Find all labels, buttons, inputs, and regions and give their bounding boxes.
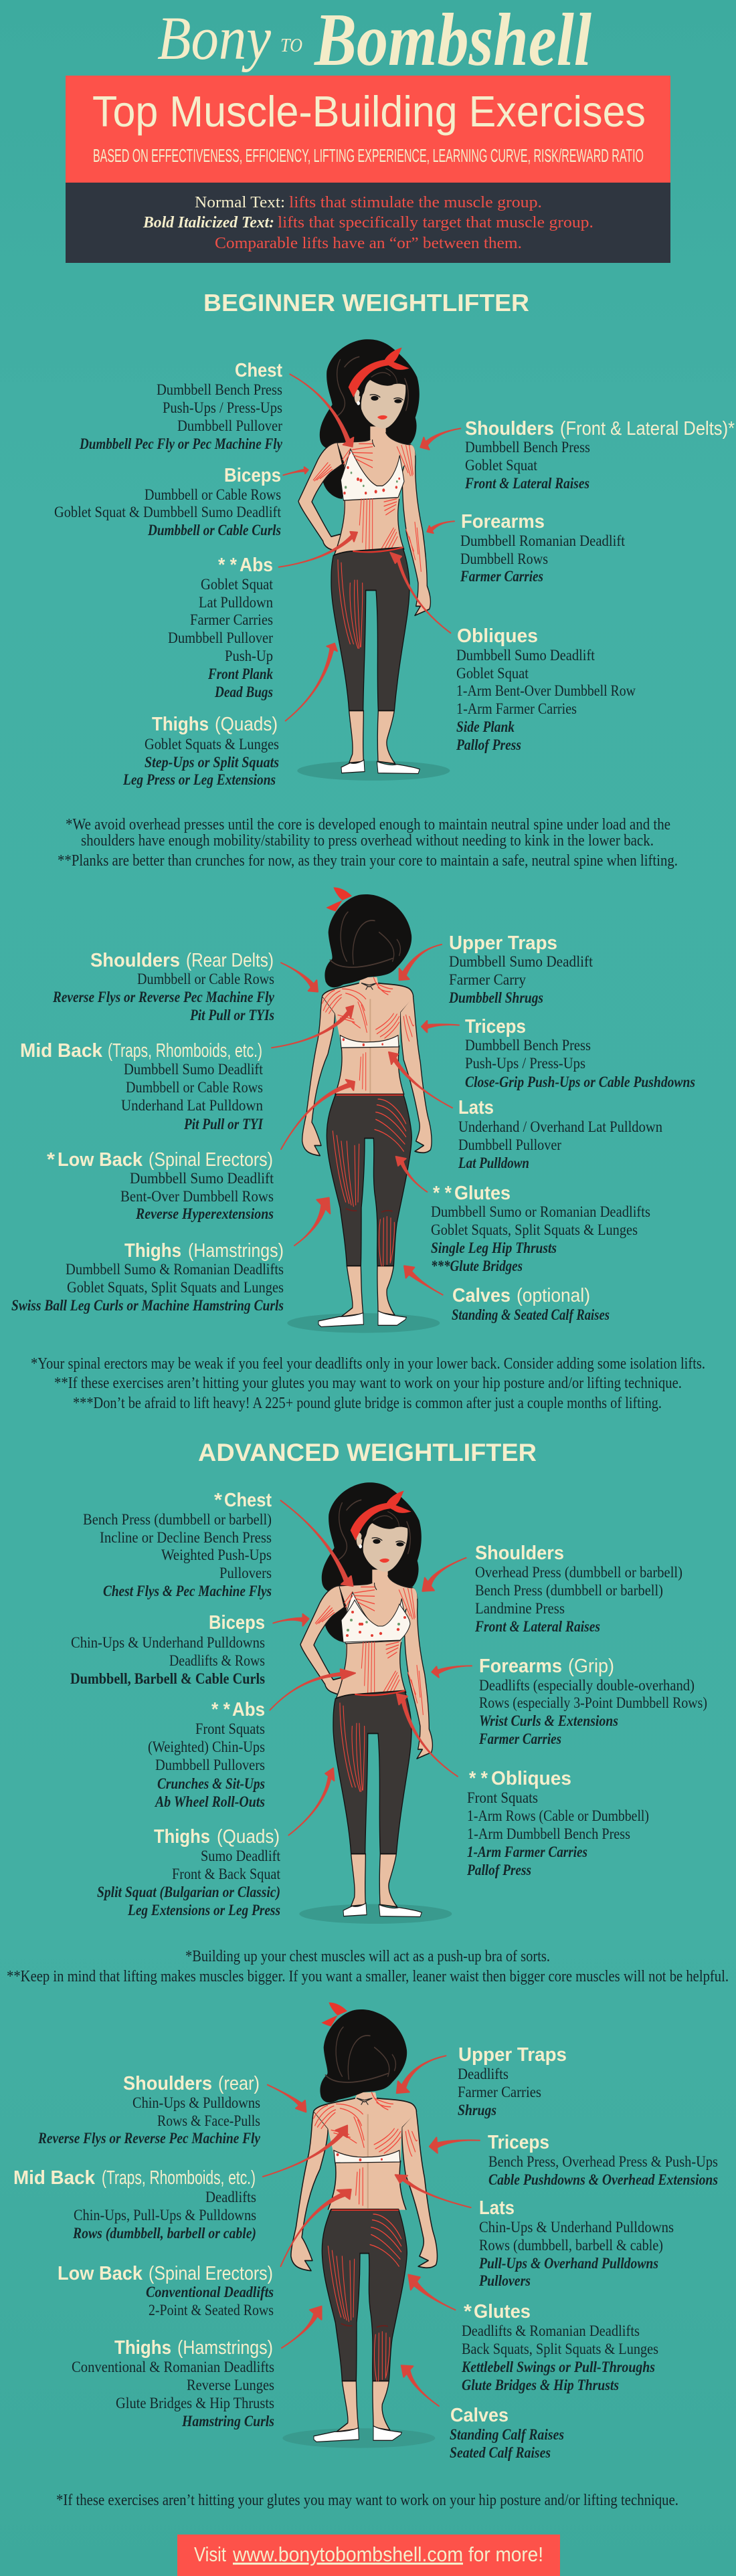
text block: advanced mid back: Mid Back xyxy=(13,2167,96,2189)
text block: glutes: Glutes xyxy=(454,1183,511,1204)
footnotes: beginner back xyxy=(31,1355,705,1412)
text block: advanced shoulders: Bench Press (dumbbell or barbell) xyxy=(475,1582,663,1599)
text block: chest: Push-Ups / Press-Ups xyxy=(163,399,282,416)
text block: mid back: Mid Back xyxy=(20,1040,103,1062)
text block: advanced hamstrings: Hamstring Curls xyxy=(181,2413,274,2430)
text block: shoulders: Shoulders xyxy=(465,418,554,439)
title: bony to bombshell logo: Bombshell xyxy=(313,0,591,82)
text block: lats: Lat Pulldown xyxy=(458,1155,529,1171)
text block: advanced abs: Abs xyxy=(232,1699,265,1720)
arrow: mid back xyxy=(272,1005,353,1048)
text block: advanced obliques: Front Squats xyxy=(467,1789,538,1806)
text block: advanced lats: Chin-Ups & Underhand Pulldowns xyxy=(479,2219,674,2236)
text block: biceps: Goblet Squat & Dumbbell Sumo Deadlift xyxy=(54,504,282,520)
arrow: chest xyxy=(290,374,353,447)
footnotes: beginner front: shoulders have enough mobility/stability to press overhead without needing to kink in the lower back. xyxy=(81,832,654,850)
text block: biceps: Biceps xyxy=(224,465,281,486)
text block: advanced rear shoulders: Chin-Ups & Pulldowns xyxy=(132,2094,260,2111)
text block: forearms: Dumbbell Romanian Deadlift xyxy=(460,532,626,549)
text block: forearms xyxy=(460,511,626,585)
text block: advanced upper traps: Shrugs xyxy=(458,2102,496,2118)
arrow: upper traps xyxy=(399,945,442,980)
illustration: woman front view, advanced xyxy=(299,1482,452,1924)
text block: thighs quads: (Quads) xyxy=(215,714,278,735)
text block: advanced obliques: 1-Arm Rows (Cable or Dumbbell) xyxy=(467,1807,649,1824)
text block: advanced chest: Bench Press (dumbbell or barbell) xyxy=(83,1511,272,1528)
text block: advanced rear shoulders xyxy=(37,2073,261,2147)
arrow: biceps xyxy=(273,1614,309,1626)
panel: header red box xyxy=(66,76,670,183)
text block: thighs quads: Leg Press or Leg Extensions xyxy=(122,771,276,788)
text block: lats: Dumbbell Pullover xyxy=(458,1136,561,1153)
text block: mid back xyxy=(20,1040,264,1132)
text block: advanced lats: Pullovers xyxy=(478,2272,531,2289)
text block: abs: Push-Up xyxy=(225,648,273,664)
text block: abs: * * xyxy=(218,555,238,576)
text block: thighs quads: Goblet Squats & Lunges xyxy=(145,736,279,753)
footer: call to action: www.bonytobombshell.com xyxy=(232,2543,463,2566)
text block: abs: Goblet Squat xyxy=(201,576,274,593)
text block: advanced calves: Standing Calf Raises xyxy=(450,2426,564,2443)
text block: advanced shoulders: Front & Lateral Raises xyxy=(474,1618,600,1635)
text block: glutes: Goblet Squats, Split Squats & Lunges xyxy=(431,1221,638,1238)
text block: thighs quads xyxy=(122,714,279,788)
arrow: forearms xyxy=(432,1666,472,1678)
heading: beginner weightlifter: BEGINNER WEIGHTLIFTER xyxy=(203,289,529,316)
text block: advanced chest: * xyxy=(214,1490,223,1511)
text block: advanced hamstrings: (Hamstrings) xyxy=(177,2337,273,2359)
text block: obliques: Goblet Squat xyxy=(456,665,529,682)
text block: triceps xyxy=(465,1016,695,1090)
arrow: obliques xyxy=(390,553,450,633)
text block: advanced mid back xyxy=(13,2167,256,2242)
text block: advanced biceps: Dumbbell, Barbell & Cable Curls xyxy=(70,1670,265,1687)
text block: forearms: Forearms xyxy=(461,511,545,532)
text block: low back xyxy=(47,1149,274,1222)
text block: biceps xyxy=(54,465,282,538)
text block: mid back: (Traps, Rhomboids, etc.) xyxy=(108,1040,262,1062)
text block: obliques: 1-Arm Bent-Over Dumbbell Row xyxy=(456,682,636,699)
text block: rear shoulders: Reverse Flys or Reverse Pec Machine Fly xyxy=(52,989,275,1005)
text block: advanced hamstrings: Conventional & Romanian Deadlifts xyxy=(72,2359,274,2375)
arrow: abs xyxy=(279,532,357,567)
text block: upper traps: Farmer Carry xyxy=(449,971,526,988)
text block: advanced hamstrings: Thighs xyxy=(114,2337,171,2359)
text block: hamstrings: (Hamstrings) xyxy=(188,1240,284,1262)
text block: advanced abs: Front Squats xyxy=(195,1720,265,1737)
text block: advanced mid back: Rows (dumbbell, barbell or cable) xyxy=(72,2225,256,2242)
text block: shoulders: Front & Lateral Raises xyxy=(464,475,589,492)
footer: call to action: Visit xyxy=(194,2543,226,2566)
text block: advanced hamstrings: Reverse Lunges xyxy=(187,2377,274,2393)
text block: advanced low back: (Spinal Erectors) xyxy=(149,2263,273,2284)
text block: rear shoulders: Pit Pull or TYIs xyxy=(189,1007,274,1023)
text block: triceps: Push-Ups / Press-Ups xyxy=(465,1055,585,1072)
text block: advanced calves xyxy=(450,2405,564,2461)
text block: abs: Front Plank xyxy=(207,666,273,682)
heading: advanced weightlifter: ADVANCED WEIGHTLIFTER xyxy=(198,1439,537,1466)
arrow: mid back xyxy=(263,2125,347,2177)
text block: abs: Farmer Carries xyxy=(190,611,273,628)
text block: advanced glutes: Glutes xyxy=(474,2301,531,2322)
text block: advanced thighs quads: Leg Extensions or Leg Press xyxy=(127,1902,280,1918)
text block: triceps: Triceps xyxy=(465,1016,526,1037)
text block: advanced calves: Calves xyxy=(450,2405,509,2426)
text block: chest xyxy=(79,360,283,452)
arrow: glutes xyxy=(396,1157,427,1192)
legend: comparable lifts: Comparable lifts have an “or” between them. xyxy=(215,235,522,252)
text block: rear shoulders: Dumbbell or Cable Rows xyxy=(137,971,274,987)
text block: forearms: Farmer Carries xyxy=(460,568,543,585)
text block: advanced rear shoulders: (rear) xyxy=(218,2073,260,2094)
text block: upper traps xyxy=(448,932,593,1006)
text block: advanced forearms xyxy=(478,1656,707,1747)
arrows: beginner back xyxy=(272,945,459,1295)
text block: advanced calves: Seated Calf Raises xyxy=(450,2444,551,2461)
arrow: abs xyxy=(270,1669,355,1710)
text block: triceps: Close-Grip Push-Ups or Cable Pushdowns xyxy=(465,1074,695,1090)
text block: glutes: ***Glute Bridges xyxy=(431,1258,523,1274)
text block: advanced chest: Chest xyxy=(224,1490,272,1511)
arrow: hamstrings xyxy=(282,2306,322,2348)
footnotes: beginner front xyxy=(58,816,678,870)
text block: advanced forearms: Forearms xyxy=(479,1656,562,1677)
text block: obliques: 1-Arm Farmer Carries xyxy=(456,700,577,717)
text block: advanced lats: Pull-Ups & Overhand Pulldowns xyxy=(478,2255,658,2272)
text block: advanced low back: Low Back xyxy=(58,2263,143,2284)
arrow: forearms xyxy=(427,521,454,533)
footer: call to action xyxy=(177,2535,560,2576)
text block: triceps: Dumbbell Bench Press xyxy=(465,1037,591,1054)
text block: upper traps: Dumbbell Shrugs xyxy=(448,989,543,1006)
legend: normal text xyxy=(195,194,542,211)
text block: advanced hamstrings: Glute Bridges & Hip Thrusts xyxy=(116,2395,274,2411)
text block: advanced biceps: Deadlifts & Rows xyxy=(169,1652,265,1669)
text block: advanced obliques xyxy=(466,1768,649,1878)
arrow: biceps xyxy=(283,467,308,475)
arrow: low back xyxy=(281,1080,355,1149)
text block: advanced shoulders: Shoulders xyxy=(475,1543,564,1564)
text block: rear shoulders: Shoulders xyxy=(90,950,180,971)
panel: legend dark box xyxy=(66,183,670,263)
legend: bold italicized text xyxy=(143,214,593,231)
text block: advanced mid back: Chin-Ups, Pull-Ups & Pulldowns xyxy=(74,2207,256,2223)
text block: advanced glutes: Back Squats, Split Squats & Lunges xyxy=(462,2341,658,2357)
text block: advanced biceps xyxy=(70,1612,265,1687)
text block: mid back: Dumbbell or Cable Rows xyxy=(126,1079,263,1096)
text block: thighs quads: Step-Ups or Split Squats xyxy=(145,754,279,771)
text block: chest: Chest xyxy=(235,360,282,381)
illustration: woman back view, advanced xyxy=(282,2003,437,2448)
text block: advanced abs: Crunches & Sit-Ups xyxy=(157,1775,265,1792)
heading: top muscle-building exercises: Top Muscle-Building Exercises xyxy=(92,87,646,136)
text block: advanced glutes: Kettlebell Swings or Pull-Throughs xyxy=(461,2359,655,2375)
text block: lats xyxy=(458,1097,662,1171)
text block: advanced shoulders: Overhead Press (dumbbell or barbell) xyxy=(475,1564,682,1581)
legend: bold italicized text: Bold Italicized Text: xyxy=(143,214,274,231)
text block: mid back: Underhand Lat Pulldown xyxy=(121,1097,263,1114)
title: bony to bombshell logo xyxy=(157,0,591,82)
text block: advanced abs: (Weighted) Chin-Ups xyxy=(148,1739,265,1755)
text block: advanced abs: Ab Wheel Roll-Outs xyxy=(154,1793,265,1810)
text block: low back: Dumbbell Sumo Deadlift xyxy=(130,1170,274,1187)
text block: advanced shoulders: Landmine Press xyxy=(475,1600,565,1617)
text block: advanced lats: Rows (dumbbell, barbell & cable) xyxy=(479,2237,663,2254)
text block: glutes: Dumbbell Sumo or Romanian Deadlifts xyxy=(431,1203,650,1220)
arrows: advanced back xyxy=(263,2056,480,2406)
arrow: obliques xyxy=(397,1694,458,1777)
text block: obliques: Side Plank xyxy=(456,718,515,735)
text block: advanced forearms: (Grip) xyxy=(568,1656,614,1677)
text block: low back: Bent-Over Dumbbell Rows xyxy=(120,1188,274,1205)
text block: thighs quads: Thighs xyxy=(152,714,209,735)
text block: abs: Lat Pulldown xyxy=(199,594,273,611)
text block: chest: Dumbbell Pec Fly or Pec Machine Fly xyxy=(79,435,283,452)
text block: low back: Low Back xyxy=(58,1149,143,1171)
text block: advanced forearms: Farmer Carries xyxy=(478,1730,561,1747)
text block: advanced low back: 2-Point & Seated Rows xyxy=(149,2302,274,2318)
text block: obliques: Pallof Press xyxy=(456,736,521,753)
text block: advanced hamstrings xyxy=(72,2337,274,2430)
text block: advanced shoulders xyxy=(474,1543,682,1635)
text block: chest: Dumbbell Pullover xyxy=(177,417,282,434)
text block: glutes: Single Leg Hip Thrusts xyxy=(431,1240,557,1256)
text block: advanced lats xyxy=(478,2197,674,2289)
arrow: calves xyxy=(404,1266,443,1295)
text block: advanced forearms: Rows (especially 3-Point Dumbbell Rows) xyxy=(479,1694,707,1711)
text block: advanced upper traps xyxy=(458,2044,567,2118)
arrow: thighs xyxy=(286,643,337,721)
text block: advanced upper traps: Farmer Carries xyxy=(458,2084,541,2100)
text block: advanced chest: Chest Flys & Pec Machine Flys xyxy=(103,1583,272,1599)
text block: advanced thighs quads: Thighs xyxy=(154,1826,210,1848)
text block: biceps: Dumbbell or Cable Rows xyxy=(145,486,281,503)
text block: advanced low back xyxy=(58,2263,274,2318)
text block: advanced thighs quads: Split Squat (Bulgarian or Classic) xyxy=(97,1884,280,1900)
text block: advanced rear shoulders: Shoulders xyxy=(123,2073,212,2094)
illustration: woman back view, beginner xyxy=(287,888,440,1333)
text block: low back: * xyxy=(47,1149,56,1171)
text block: advanced glutes: Glute Bridges & Hip Thrusts xyxy=(462,2377,619,2393)
text block: advanced glutes: * xyxy=(464,2301,472,2322)
text block: upper traps: Upper Traps xyxy=(449,932,557,954)
text block: abs: Dumbbell Pullover xyxy=(168,629,273,646)
text block: abs xyxy=(168,555,274,700)
legend: normal text: lifts that stimulate the muscle group. xyxy=(289,194,542,211)
text block: advanced glutes: Deadlifts & Romanian Deadlifts xyxy=(462,2322,640,2339)
text block: shoulders: Dumbbell Bench Press xyxy=(465,439,590,456)
text block: advanced abs: Dumbbell Pullovers xyxy=(155,1757,265,1773)
text block: advanced thighs quads: Sumo Deadlift xyxy=(201,1848,281,1864)
text block: obliques: Dumbbell Sumo Deadlift xyxy=(456,647,595,664)
text block: forearms: Dumbbell Rows xyxy=(460,551,548,567)
legend: bold italicized text: lifts that specifically target that muscle group. xyxy=(278,214,593,231)
text block: advanced triceps xyxy=(488,2132,718,2188)
text block: hamstrings: Goblet Squats, Split Squats and Lunges xyxy=(67,1279,284,1296)
text block: advanced rear shoulders: Rows & Face-Pulls xyxy=(157,2112,260,2129)
text block: upper traps: Dumbbell Sumo Deadlift xyxy=(449,953,593,970)
arrow: calves xyxy=(401,2365,439,2406)
text block: hamstrings: Dumbbell Sumo & Romanian Deadlifts xyxy=(66,1261,284,1278)
text block: advanced chest: Pullovers xyxy=(219,1565,272,1581)
text block: glutes xyxy=(431,1183,650,1274)
arrow: lats xyxy=(395,2175,471,2207)
arrow: shoulders xyxy=(422,1558,466,1591)
text block: obliques: Obliques xyxy=(457,625,538,647)
text block: shoulders: Goblet Squat xyxy=(465,457,538,474)
text block: mid back: Pit Pull or TYI xyxy=(183,1116,264,1132)
text block: hamstrings xyxy=(11,1240,284,1314)
arrow: chest xyxy=(280,1500,353,1586)
arrow: low back xyxy=(280,2189,351,2266)
illustration: woman front view, beginner xyxy=(297,339,450,781)
text block: advanced biceps: Biceps xyxy=(209,1612,265,1633)
text block: advanced glutes xyxy=(461,2301,658,2393)
text block: rear shoulders xyxy=(52,950,275,1023)
arrow: triceps xyxy=(430,2137,480,2153)
text block: obliques xyxy=(456,625,636,753)
text block: advanced upper traps: Deadlifts xyxy=(458,2066,509,2082)
text block: advanced lats: Lats xyxy=(479,2197,515,2219)
text block: advanced obliques: 1-Arm Farmer Carries xyxy=(467,1844,587,1860)
footer: call to action: for more! xyxy=(468,2543,543,2566)
text block: advanced mid back: (Traps, Rhomboids, etc.) xyxy=(102,2167,256,2189)
text block: shoulders xyxy=(464,418,735,492)
footnotes: advanced front: *Building up your chest muscles will act as a push-up bra of sorts. xyxy=(185,1948,550,1965)
footnotes: advanced front xyxy=(7,1948,729,1985)
arrows: advanced front xyxy=(270,1500,472,1835)
legend: normal text: Normal Text: xyxy=(195,194,285,211)
text block: calves: Calves xyxy=(452,1285,511,1306)
text block: rear shoulders: (Rear Delts) xyxy=(186,950,274,971)
text block: advanced forearms: Deadlifts (especially double-overhand) xyxy=(479,1677,695,1694)
title: bony to bombshell logo: TO xyxy=(280,35,302,56)
text block: calves: (optional) xyxy=(517,1285,590,1306)
text block: advanced obliques: * * xyxy=(469,1768,488,1789)
text block: calves: Standing & Seated Calf Raises xyxy=(452,1306,610,1323)
text block: mid back: Dumbbell Sumo Deadlift xyxy=(124,1061,264,1078)
arrow: triceps xyxy=(422,1021,459,1032)
text block: low back: (Spinal Erectors) xyxy=(149,1149,273,1171)
text block: advanced obliques: Obliques xyxy=(491,1768,571,1789)
text block: advanced thighs quads: (Quads) xyxy=(217,1826,280,1848)
text block: abs: Dead Bugs xyxy=(214,684,273,700)
text block: low back: Reverse Hyperextensions xyxy=(135,1205,274,1222)
text block: advanced low back: Conventional Deadlifts xyxy=(146,2284,274,2300)
text block: advanced chest: Incline or Decline Bench Press xyxy=(100,1529,272,1546)
text block: advanced triceps: Triceps xyxy=(488,2132,549,2153)
arrow: rear delts xyxy=(281,963,318,992)
text block: advanced abs: * * xyxy=(211,1699,231,1720)
arrow: shoulders xyxy=(420,428,460,450)
arrows: beginner front xyxy=(279,374,460,721)
text block: advanced mid back: Deadlifts xyxy=(205,2189,256,2205)
arrow: glutes xyxy=(408,2275,455,2310)
text block: advanced abs xyxy=(148,1699,265,1810)
text block: chest: Dumbbell Bench Press xyxy=(157,381,282,398)
text block: lats: Lats xyxy=(458,1097,494,1118)
arrow: upper traps xyxy=(397,2056,446,2093)
text block: biceps: Dumbbell or Cable Curls xyxy=(147,522,281,538)
text block: advanced obliques: Pallof Press xyxy=(466,1862,531,1878)
text block: hamstrings: Thighs xyxy=(124,1240,181,1262)
arrow: lats xyxy=(389,1052,452,1108)
text block: advanced upper traps: Upper Traps xyxy=(458,2044,567,2066)
text block: advanced thighs quads xyxy=(97,1826,281,1918)
text block: advanced obliques: 1-Arm Dumbbell Bench Press xyxy=(467,1825,630,1842)
arrow: rear delts xyxy=(268,2085,306,2112)
text block: advanced forearms: Wrist Curls & Extensions xyxy=(479,1712,618,1729)
text block: lats: Underhand / Overhand Lat Pulldown xyxy=(458,1118,662,1135)
arrow: hamstrings xyxy=(294,1198,330,1246)
text block: advanced biceps: Chin-Ups & Underhand Pulldowns xyxy=(71,1634,265,1651)
text block: abs: Abs xyxy=(240,555,273,576)
text block: advanced chest: Weighted Push-Ups xyxy=(161,1547,272,1563)
text block: advanced chest xyxy=(83,1490,272,1599)
text block: hamstrings: Swiss Ball Leg Curls or Machine Hamstring Curls xyxy=(11,1297,284,1314)
text block: calves xyxy=(452,1285,610,1323)
arrow: thighs xyxy=(288,1768,334,1835)
text block: advanced rear shoulders: Reverse Flys or Reverse Pec Machine Fly xyxy=(37,2130,261,2147)
text block: glutes: * * xyxy=(433,1183,452,1204)
title: bony to bombshell logo: Bony xyxy=(157,4,271,72)
text block: advanced thighs quads: Front & Back Squat xyxy=(172,1866,281,1882)
